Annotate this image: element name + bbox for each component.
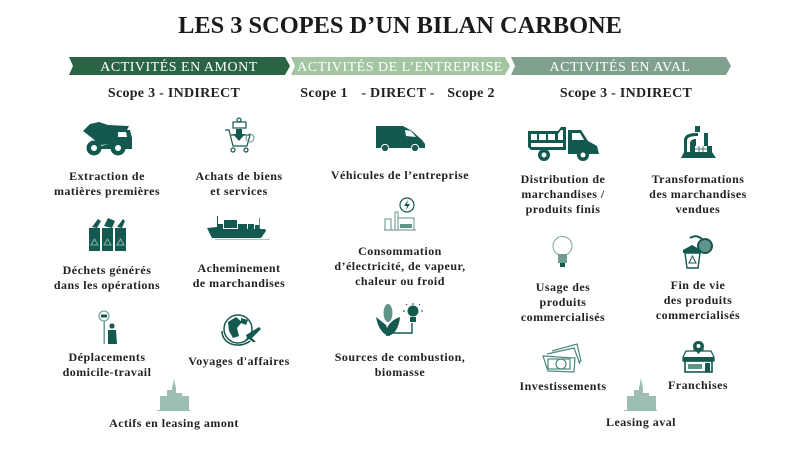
label: commercialisés	[521, 310, 605, 324]
icon: shop with location pin	[683, 341, 714, 372]
label: Achats de biens	[195, 169, 283, 183]
icon: globe with plane	[222, 315, 261, 345]
label: Investissements	[519, 379, 607, 393]
label: commercialisés	[656, 308, 740, 322]
icon: banknotes	[543, 344, 581, 372]
scope heading: amont: Scope 3 - INDIRECT	[108, 86, 240, 101]
label: Transformations	[652, 172, 744, 186]
icon: factory	[681, 126, 716, 158]
scope heading: entreprise: Scope 2	[447, 86, 495, 101]
icon: flatbed truck	[528, 127, 599, 161]
label: marchandises /	[521, 187, 605, 201]
label: domicile-travail	[63, 365, 152, 379]
label: Voyages d'affaires	[188, 354, 290, 368]
label: d’électricité, de vapeur,	[334, 259, 466, 273]
label: Distribution de	[521, 172, 606, 186]
label: de marchandises	[193, 276, 285, 290]
title: LES 3 SCOPES D’UN BILAN CARBONE	[178, 12, 622, 39]
label: Actifs en leasing amont	[109, 416, 239, 430]
icon: container ship	[207, 216, 270, 240]
icon: mining truck	[83, 122, 132, 156]
label: chaleur ou froid	[355, 274, 445, 288]
label: matières premières	[54, 184, 160, 198]
banner: activités de l'entreprise: ACTIVITÉS DE L’ENTREPRISE	[297, 58, 503, 75]
label: Acheminement	[198, 261, 280, 275]
icon: waste bins	[89, 218, 126, 251]
scope heading: entreprise: - DIRECT -	[361, 86, 435, 101]
label: produits finis	[526, 202, 600, 216]
icon: city skyline	[157, 379, 190, 411]
label: et services	[210, 184, 268, 198]
icon: light bulb	[553, 236, 572, 267]
icon: delivery van	[376, 126, 425, 152]
banner: activités en aval	[511, 57, 731, 75]
label: des produits	[664, 293, 732, 307]
banner: activités en aval: ACTIVITÉS EN AVAL	[550, 58, 690, 75]
label: Sources de combustion,	[335, 350, 465, 364]
icon: shopping cart with gift	[225, 118, 254, 152]
label: Déchets générés	[63, 263, 151, 277]
label: biomasse	[375, 365, 425, 379]
label: vendues	[676, 202, 720, 216]
label: Usage des	[536, 280, 590, 294]
label: Véhicules de l’entreprise	[331, 168, 469, 182]
label: Déplacements	[69, 350, 145, 364]
icon: city skyline aval	[624, 378, 657, 411]
label: Extraction de	[69, 169, 145, 183]
label: Leasing aval	[606, 415, 676, 429]
scope heading: aval: Scope 3 - INDIRECT	[560, 86, 692, 101]
banner: activités en amont	[69, 57, 290, 75]
label: des marchandises	[649, 187, 747, 201]
scope heading: entreprise	[300, 86, 495, 101]
icon: recycling bin and gear	[683, 236, 712, 268]
banner: activités en amont: ACTIVITÉS EN AMONT	[100, 58, 258, 75]
icon: factory with electricity	[384, 198, 416, 230]
label: Franchises	[668, 378, 728, 392]
icon: corn and light bulb	[376, 303, 423, 336]
icon: bus stop and commuter	[99, 311, 117, 344]
label: Fin de vie	[671, 278, 726, 292]
scope heading: entreprise: Scope 1	[300, 86, 348, 101]
label: produits	[540, 295, 586, 309]
label: dans les opérations	[54, 278, 160, 292]
label: Consommation	[358, 244, 442, 258]
